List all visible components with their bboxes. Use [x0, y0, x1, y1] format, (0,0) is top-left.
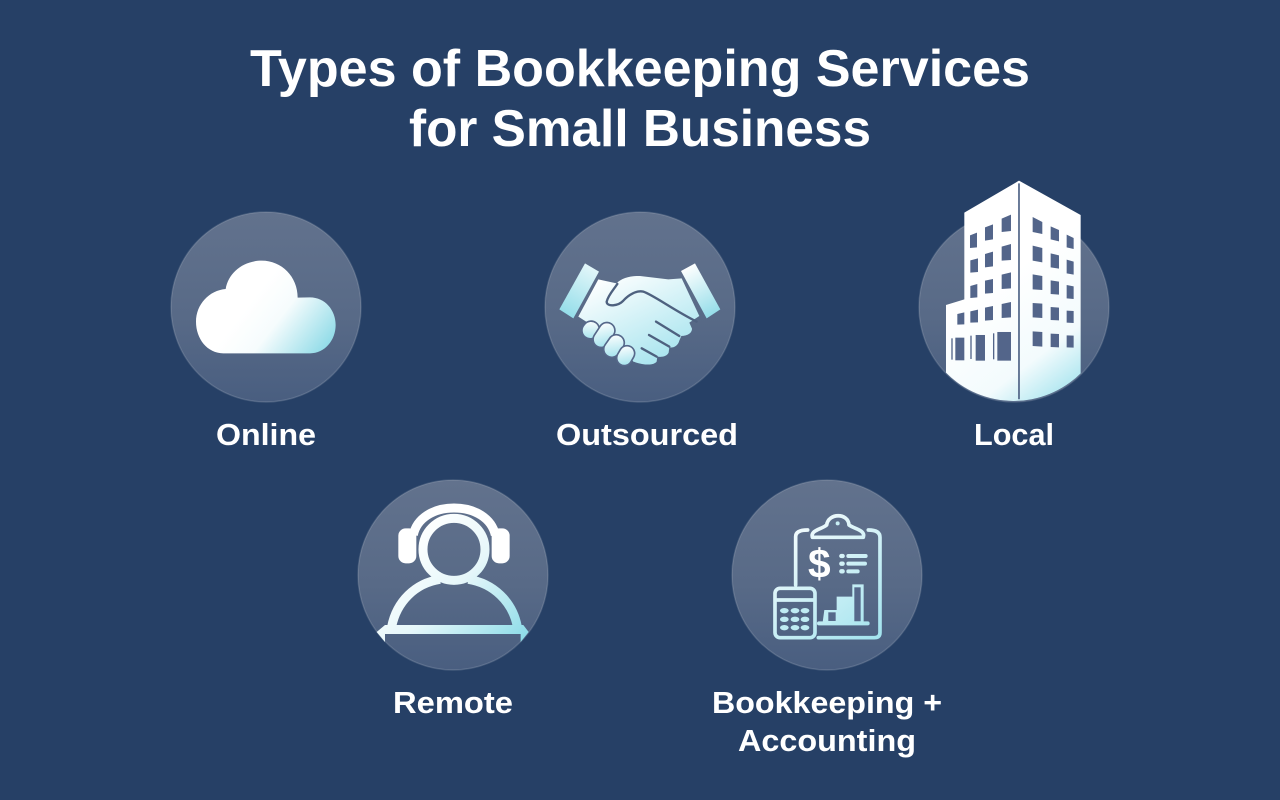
- label: bookkeeping + accounting: Bookkeeping +: [712, 685, 942, 720]
- panel: bookkeeping + accounting: [712, 480, 942, 758]
- label: bookkeeping + accounting: Accounting: [738, 723, 916, 758]
- bookkeeping circle: [732, 480, 922, 670]
- label: outsourced: Outsourced: [556, 417, 738, 452]
- label: bookkeeping + accounting: [712, 685, 942, 758]
- title: [250, 40, 1030, 158]
- panel: outsourced: [545, 212, 738, 452]
- icon: clipboard with calculator and chart: $: [808, 540, 831, 586]
- title: Types of Bookkeeping Services: [250, 40, 1030, 98]
- icon: clipboard with calculator and chart: [775, 516, 880, 638]
- outsourced circle: [545, 212, 735, 402]
- icon: office building: [946, 181, 1081, 401]
- remote circle: [358, 480, 548, 670]
- label: remote: Remote: [393, 685, 513, 720]
- label: local: Local: [974, 417, 1054, 452]
- local circle: [919, 212, 1109, 402]
- icon: handshake: [559, 263, 720, 368]
- label: online: Online: [216, 417, 316, 452]
- online circle: [171, 212, 361, 402]
- icon: person with headset: [377, 508, 529, 642]
- panel: online: [171, 212, 361, 452]
- panel: local: [919, 181, 1109, 452]
- title: for Small Business: [409, 100, 871, 158]
- panel: remote: [358, 480, 548, 720]
- icon: cloud: [196, 261, 336, 353]
